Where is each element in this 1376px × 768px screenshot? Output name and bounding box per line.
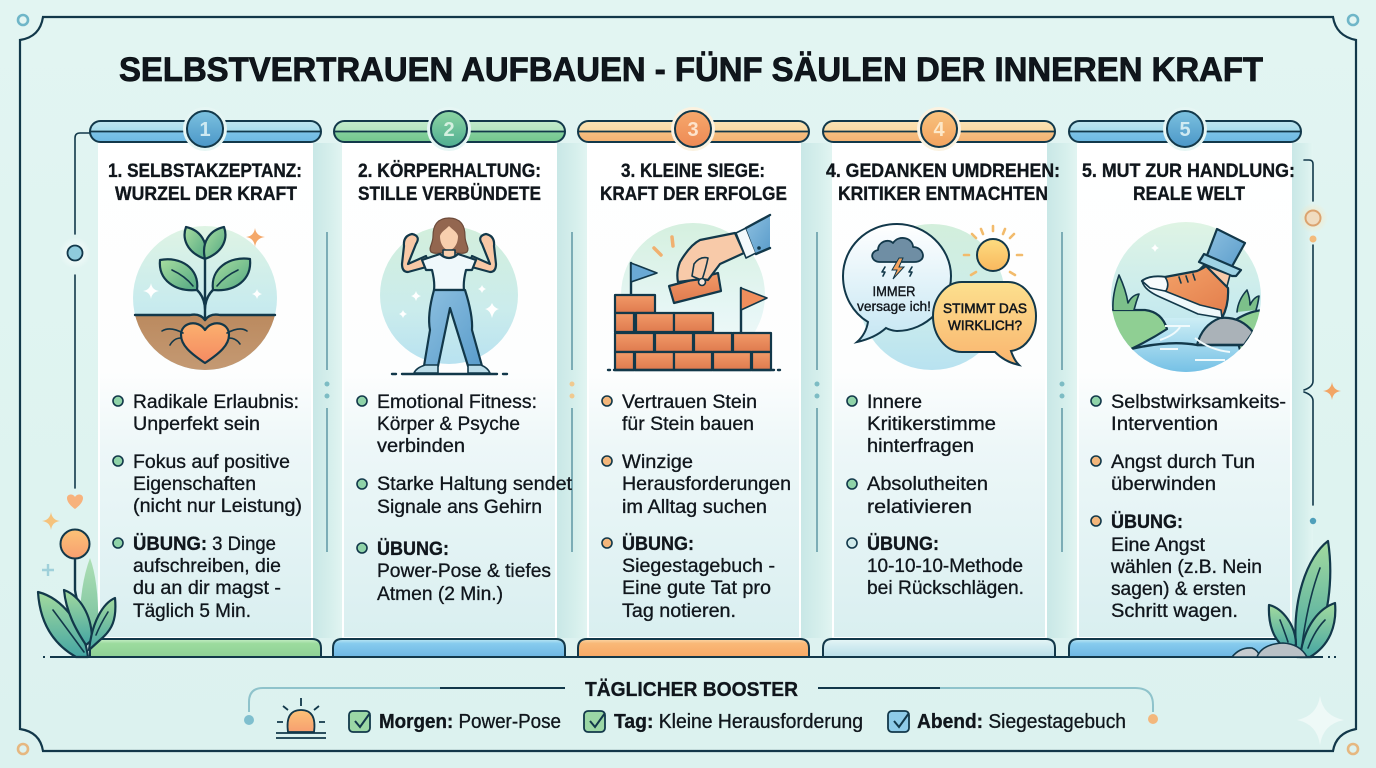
text block: Kleine Siege: Herausforderungen <box>622 473 791 495</box>
footer: daily booster <box>244 678 1158 738</box>
header band with number badge: 2 <box>443 119 455 141</box>
text block: Selbstakzeptanz: aufschreiben, die <box>133 555 281 577</box>
icon: foot stepping onto stone <box>1111 222 1261 372</box>
icon: hand laying brick on wall <box>608 215 780 370</box>
item: Morgen: Morgen: Power-Pose <box>379 711 561 733</box>
text block: Kleine Siege: ÜBUNG: <box>622 532 694 555</box>
text block: Selbstakzeptanz: ÜBUNG: 3 Dinge <box>133 532 276 555</box>
icon: decorative plant and rocks bottom right <box>1232 541 1335 657</box>
header band with number badge <box>578 107 809 151</box>
item: Tag: Tag: Kleine Herausforderung <box>614 711 863 733</box>
panel: Kleine Siege <box>578 107 809 638</box>
panel: Mut zur Handlung <box>1069 107 1301 638</box>
left speech bubble <box>843 224 951 342</box>
text block: Selbstakzeptanz: Fokus auf positive <box>133 451 290 473</box>
heading: 5. MUT ZUR HANDLUNG: <box>1082 160 1295 182</box>
text block: Kleine Siege: für Stein bauen <box>622 413 754 435</box>
header band with number badge: 1 <box>199 119 211 141</box>
text block: Mut zur Handlung: Intervention <box>1111 413 1218 435</box>
icon: plant with heart roots <box>133 226 277 370</box>
panel: Gedanken umdrehen <box>823 107 1060 638</box>
heading: KRAFT DER ERFOLGE <box>600 183 787 205</box>
header band with number badge <box>90 107 321 151</box>
text block: Körperhaltung: Starke Haltung sendet <box>377 473 573 495</box>
heading: 4. GEDANKEN UMDREHEN: <box>826 160 1060 182</box>
heading <box>108 160 302 205</box>
card background <box>99 136 312 638</box>
text block: Selbstakzeptanz: du an dir magst - <box>133 577 281 599</box>
card background <box>833 136 1046 638</box>
panel: Selbstakzeptanz <box>90 107 321 638</box>
heading <box>358 159 541 205</box>
footer heading: TÄGLICHER BOOSTER <box>585 678 799 701</box>
text block: Kleine Siege: Vertrauen Stein <box>622 391 757 413</box>
heading <box>600 160 787 205</box>
text block: Kleine Siege: Tag notieren. <box>622 600 736 622</box>
text block: Gedanken umdrehen: ÜBUNG: <box>867 532 939 555</box>
text block: Gedanken umdrehen: Kritikerstimme <box>867 413 996 435</box>
text block: Selbstakzeptanz: Täglich 5 Min. <box>133 600 251 622</box>
text block: Körperhaltung: Körper & Psyche <box>377 413 520 435</box>
text block: Selbstakzeptanz <box>113 391 302 622</box>
heading: 2. KÖRPERHALTUNG: <box>358 159 541 182</box>
heading: KRITIKER ENTMACHTEN <box>838 183 1048 205</box>
header band with number badge <box>334 107 565 151</box>
faint sparkle bottom right <box>1297 696 1344 745</box>
header band with number badge <box>1069 107 1301 151</box>
text block: Mut zur Handlung: Selbstwirksamkeits- <box>1111 391 1286 413</box>
text block: Kleine Siege <box>602 391 791 622</box>
text block: Gedanken umdrehen <box>847 391 1024 599</box>
text block: Kleine Siege: Winzige <box>622 451 693 473</box>
header band with number badge: 5 <box>1179 119 1191 141</box>
icon: decorative plant bottom left <box>38 530 115 657</box>
text block: Mut zur Handlung: Schritt wagen. <box>1111 600 1238 622</box>
text block: Mut zur Handlung: ÜBUNG: <box>1111 510 1183 533</box>
card background <box>1078 136 1291 638</box>
title: SELBSTVERTRAUEN AUFBAUEN - FÜNF SÄULEN DER INNEREN KRAFT <box>119 50 1263 89</box>
text block: Mut zur Handlung <box>1091 391 1286 622</box>
item: Abend: Abend: Siegestagebuch <box>917 711 1126 733</box>
left speech bubble: IMMER <box>872 283 916 299</box>
icon: speech bubbles with cloud and sun <box>843 224 1036 370</box>
icon: woman in power pose <box>380 218 518 374</box>
text block: Mut zur Handlung: sagen) & ersten <box>1111 578 1246 600</box>
text block: Selbstakzeptanz: Radikale Erlaubnis: <box>133 391 299 413</box>
right speech bubble: STIMMT DAS <box>943 300 1027 316</box>
header band with number badge <box>823 107 1055 151</box>
text block: Gedanken umdrehen: Innere <box>867 391 922 413</box>
icon: sunrise <box>276 698 326 738</box>
text block: Selbstakzeptanz: Eigenschaften <box>133 473 256 495</box>
text block: Körperhaltung: ÜBUNG: <box>377 537 449 560</box>
text block: Mut zur Handlung: überwinden <box>1111 473 1216 495</box>
text block: Mut zur Handlung: Eine Angst <box>1111 534 1206 556</box>
text block: Kleine Siege: Eine gute Tat pro <box>622 577 771 599</box>
separators between columns <box>312 143 1313 638</box>
text block: Gedanken umdrehen: hinterfragen <box>867 435 974 457</box>
text block: Gedanken umdrehen: Absolutheiten <box>867 473 988 495</box>
heading: STILLE VERBÜNDETE <box>358 182 541 205</box>
card background <box>588 136 800 638</box>
text block: Körperhaltung: Signale ans Gehirn <box>377 496 542 518</box>
text block: Gedanken umdrehen: 10-10-10-Methode <box>867 555 1023 577</box>
heading <box>1082 160 1295 205</box>
text block: Selbstakzeptanz: (nicht nur Leistung) <box>133 495 302 517</box>
heading <box>826 160 1060 205</box>
header band with number badge: 4 <box>933 119 945 141</box>
text block: Selbstakzeptanz: Unperfekt sein <box>133 413 260 435</box>
text block: Mut zur Handlung: Angst durch Tun <box>1111 451 1255 473</box>
right connector with ornaments <box>1298 160 1341 524</box>
text block: Körperhaltung: Emotional Fitness: <box>377 391 537 413</box>
heading: REALE WELT <box>1133 183 1245 205</box>
left speech bubble: versage ich! <box>857 298 931 314</box>
right speech bubble <box>933 282 1036 365</box>
footer connector line <box>244 688 1158 725</box>
text block: Gedanken umdrehen: relativieren <box>867 496 972 518</box>
text block: Körperhaltung: verbinden <box>377 435 465 457</box>
text block: Mut zur Handlung: wählen (z.B. Nein <box>1110 556 1262 578</box>
card background <box>343 136 556 638</box>
right speech bubble: WIRKLICH? <box>948 317 1022 333</box>
bottom coloured plinths and baseline <box>43 639 1336 657</box>
text block: Gedanken umdrehen: bei Rückschlägen. <box>867 577 1024 599</box>
heading: 1. SELBSTAKZEPTANZ: <box>108 160 302 182</box>
text block: Kleine Siege: Siegestagebuch - <box>622 555 775 577</box>
panel: Körperhaltung <box>334 107 573 638</box>
text block: Körperhaltung: Atmen (2 Min.) <box>377 583 503 605</box>
left connector with ornaments <box>42 133 91 576</box>
header band with number badge: 3 <box>687 119 699 141</box>
text block: Kleine Siege: im Alltag suchen <box>622 496 767 518</box>
text block: Körperhaltung <box>357 391 573 605</box>
sun <box>964 226 1022 275</box>
heading: 3. KLEINE SIEGE: <box>621 160 765 182</box>
text block: Körperhaltung: Power-Pose & tiefes <box>377 560 551 582</box>
heading: WURZEL DER KRAFT <box>115 183 297 205</box>
